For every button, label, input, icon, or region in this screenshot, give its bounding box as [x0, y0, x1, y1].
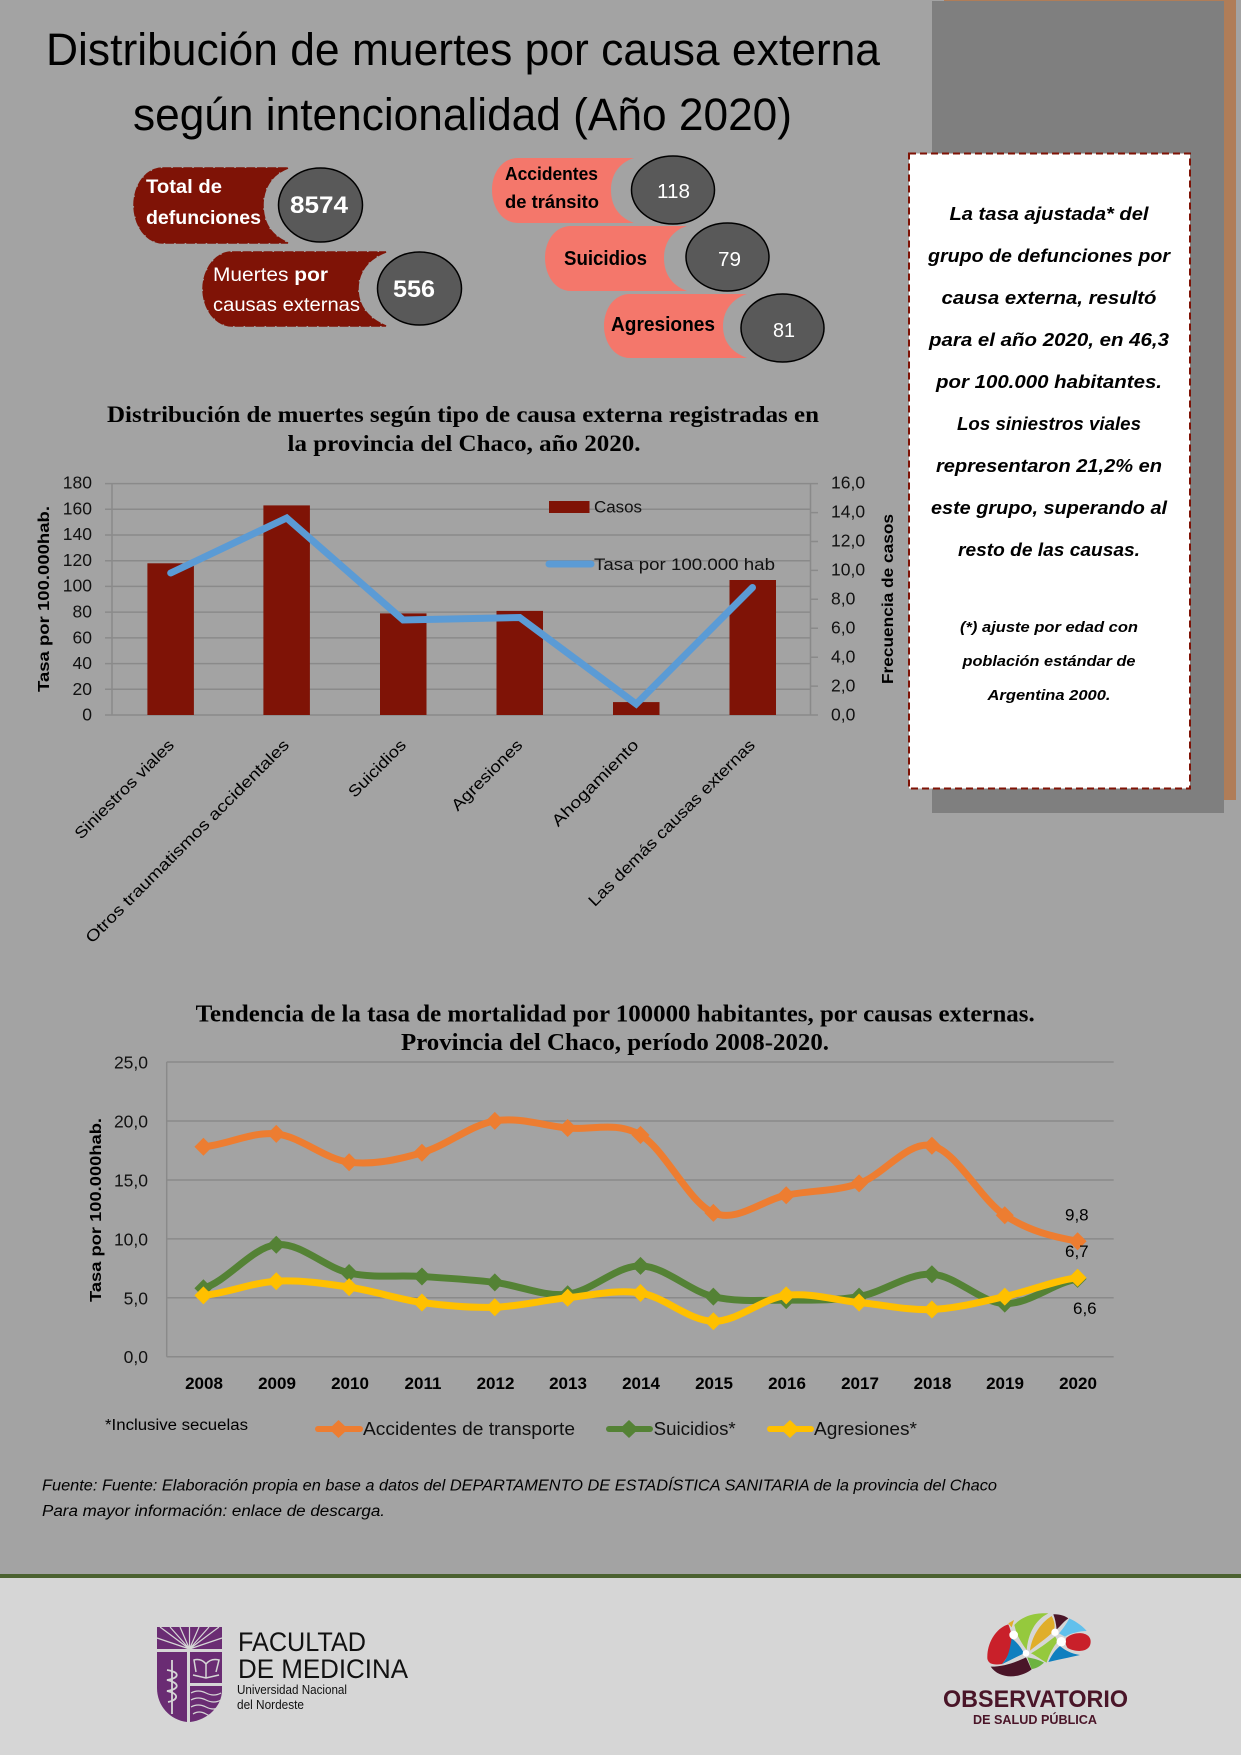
stat: muertes por causas externas: 556 [393, 276, 435, 303]
category labels [72, 737, 759, 947]
year labels: 2017 [841, 1374, 879, 1393]
category labels: Ahogamiento [549, 737, 642, 830]
footer rule [0, 1574, 1241, 1578]
callout: tasa ajustada: resto de las causas. [958, 540, 1140, 560]
year labels: 2011 [405, 1374, 441, 1393]
left axis title: Tasa por 100.000hab. [36, 506, 53, 692]
source note: Fuente: Fuente: Elaboración propia en base a datos del DEPARTAMENTO DE ESTADÍSTICA SANITARIA de la provincia del Chaco [42, 1478, 997, 1494]
heading: chart 2: Tendencia de la tasa de mortalidad por 100000 habitantes, por causas externas. [196, 1002, 1035, 1028]
right axis numbers: 16,0 [831, 472, 865, 492]
stat: suicidios: 79 [718, 249, 741, 271]
left axis numbers: 20 [73, 679, 92, 699]
year labels: 2009 [258, 1374, 296, 1393]
text: facultad de medicina [237, 1627, 408, 1712]
panel: decorative brown backing [944, 0, 1236, 800]
text: facultad de medicina: FACULTAD [238, 1627, 366, 1657]
callout: tasa ajustada: causa externa, resultó [942, 288, 1157, 308]
stat: total de defunciones [134, 168, 362, 243]
heading: chart 2: Provincia del Chaco, período 2008-2020. [401, 1030, 829, 1056]
right axis numbers: 4,0 [831, 647, 856, 667]
right axis numbers: 10,0 [831, 560, 865, 580]
y axis numbers: 10,0 [114, 1229, 148, 1249]
y axis title: Tasa por 100.000hab. [88, 1118, 105, 1302]
data labels: 9,8 [1065, 1206, 1089, 1224]
year labels: 2015 [695, 1374, 733, 1393]
footer band [0, 1578, 1241, 1755]
stat: accidentes de tránsito: de tránsito [505, 192, 599, 212]
title [46, 24, 881, 140]
y axis numbers: 20,0 [114, 1112, 148, 1132]
stat: agresiones [604, 294, 824, 362]
text: facultad de medicina: del Nordeste [237, 1697, 304, 1712]
line: suicidios [203, 1245, 1078, 1304]
data labels: 6,6 [1073, 1299, 1097, 1318]
stat: muertes por causas externas [203, 252, 462, 326]
year labels: 2008 [185, 1374, 223, 1393]
legend: tasa: Tasa por 100.000 hab [594, 555, 775, 574]
left axis numbers: 160 [63, 498, 92, 518]
legend: suicidios [609, 1419, 736, 1439]
left axis numbers: 140 [63, 524, 92, 544]
bars: casos [147, 505, 776, 715]
right axis numbers: 12,0 [831, 530, 865, 550]
callout: tasa ajustada: por 100.000 habitantes. [935, 372, 1162, 392]
category labels: Otros traumatismos accidentales [83, 737, 293, 947]
line: agresiones [203, 1278, 1078, 1321]
legend: casos [549, 498, 642, 516]
logo: facultad de medicina [157, 1627, 408, 1722]
y axis numbers: 25,0 [114, 1052, 148, 1072]
year labels: 2014 [622, 1374, 660, 1393]
heading: chart 1: la provincia del Chaco, año 2020. [288, 431, 640, 456]
legend: agresiones [770, 1419, 917, 1439]
title: Distribución de muertes por causa externa [46, 24, 881, 75]
category labels: Las demás causas externas [586, 737, 759, 910]
data labels: 6,7 [1065, 1242, 1089, 1261]
stat: accidentes de tránsito [492, 156, 714, 224]
left axis numbers: 120 [63, 550, 92, 570]
note: inclusive secuelas: *Inclusive secuelas [105, 1417, 248, 1434]
stat: agresiones: 81 [773, 320, 795, 342]
stat: agresiones: Agresiones [611, 314, 715, 336]
left axis numbers: 0 [82, 704, 92, 724]
stat: muertes por causas externas: Muertes por [213, 265, 329, 286]
legend: suicidios: Suicidios* [654, 1419, 736, 1439]
stat: total de defunciones: Total de [146, 177, 222, 198]
title: según intencionalidad (Año 2020) [133, 89, 792, 140]
line: accidentes de transporte [203, 1120, 1078, 1241]
y axis numbers: 15,0 [114, 1170, 148, 1190]
heading: chart 2 [196, 1002, 1035, 1056]
year labels: 2019 [986, 1374, 1024, 1393]
callout: tasa ajustada: Los siniestros viales [957, 414, 1141, 434]
year labels: 2012 [477, 1374, 514, 1393]
chart: tendencia 2008-2020 [88, 1052, 1114, 1439]
legend: agresiones: Agresiones* [814, 1419, 917, 1439]
chart: casos y tasa por tipo de causa [36, 472, 897, 947]
legend: accidentes: Accidentes de transporte [363, 1419, 575, 1439]
callout: tasa ajustada: este grupo, superando al [931, 498, 1168, 518]
panel: gray backing [932, 1, 1224, 813]
left axis numbers: 80 [73, 602, 92, 622]
callout: tasa ajustada [909, 154, 1190, 788]
heading: chart 1: Distribución de muertes según tipo de causa externa registradas en [107, 402, 819, 427]
stat: suicidios [545, 223, 769, 291]
text: facultad de medicina: Universidad Nacional [237, 1682, 347, 1697]
callout: tasa ajustada: (*) ajuste por edad con [960, 619, 1138, 636]
callout: tasa ajustada: La tasa ajustada* del [950, 204, 1150, 224]
year labels: 2016 [768, 1374, 806, 1393]
right axis numbers [831, 472, 865, 724]
right axis title: Frecuencia de casos [880, 514, 897, 684]
text: facultad de medicina: DE MEDICINA [238, 1654, 408, 1684]
stat: total de defunciones: 8574 [290, 192, 349, 219]
stat: suicidios: Suicidios [564, 248, 647, 270]
right axis numbers: 2,0 [831, 676, 856, 696]
legend: casos: Casos [594, 498, 642, 516]
year labels [185, 1374, 1097, 1393]
left axis numbers: 180 [63, 472, 92, 492]
heading: chart 1 [107, 402, 819, 456]
y axis numbers [114, 1052, 148, 1367]
left axis numbers: 60 [73, 627, 92, 647]
left axis numbers [63, 472, 92, 724]
left axis numbers: 100 [63, 576, 92, 596]
text: observatorio: OBSERVATORIO [943, 1686, 1128, 1713]
year labels: 2010 [331, 1374, 369, 1393]
year labels: 2013 [549, 1374, 587, 1393]
callout: tasa ajustada: Argentina 2000. [986, 687, 1110, 704]
stat: muertes por causas externas: causas externas [213, 295, 360, 316]
logo: observatorio de salud pública [943, 1613, 1128, 1727]
stat: accidentes de tránsito: 118 [657, 181, 690, 203]
right axis numbers: 6,0 [831, 618, 856, 638]
line: tasa [171, 518, 752, 704]
category labels: Siniestros viales [72, 737, 178, 843]
icon: brain [987, 1613, 1091, 1676]
right axis numbers: 0,0 [831, 704, 856, 724]
y axis numbers: 0,0 [124, 1347, 148, 1367]
stat: accidentes de tránsito: Accidentes [505, 164, 598, 184]
text: de salud pública: DE SALUD PÚBLICA [973, 1712, 1098, 1727]
callout: tasa ajustada: para el año 2020, en 46,3 [928, 330, 1169, 350]
right axis numbers: 8,0 [831, 588, 856, 608]
callout: tasa ajustada: población estándar de [961, 653, 1136, 670]
data labels [1065, 1206, 1097, 1318]
year labels: 2020 [1059, 1374, 1097, 1393]
source note [42, 1478, 997, 1520]
icon: shield [157, 1627, 222, 1722]
callout: tasa ajustada: representaron 21,2% en [936, 456, 1162, 476]
y axis numbers: 5,0 [124, 1288, 148, 1308]
right axis numbers: 14,0 [831, 502, 865, 522]
left axis numbers: 40 [73, 653, 92, 673]
stat: total de defunciones: defunciones [146, 208, 261, 229]
category labels: Suicidios [345, 737, 410, 801]
category labels: Agresiones [449, 737, 526, 815]
callout: tasa ajustada: grupo de defunciones por [927, 246, 1171, 266]
source note: Para mayor información: enlace de descarga. [42, 1503, 385, 1520]
year labels: 2018 [914, 1374, 951, 1393]
